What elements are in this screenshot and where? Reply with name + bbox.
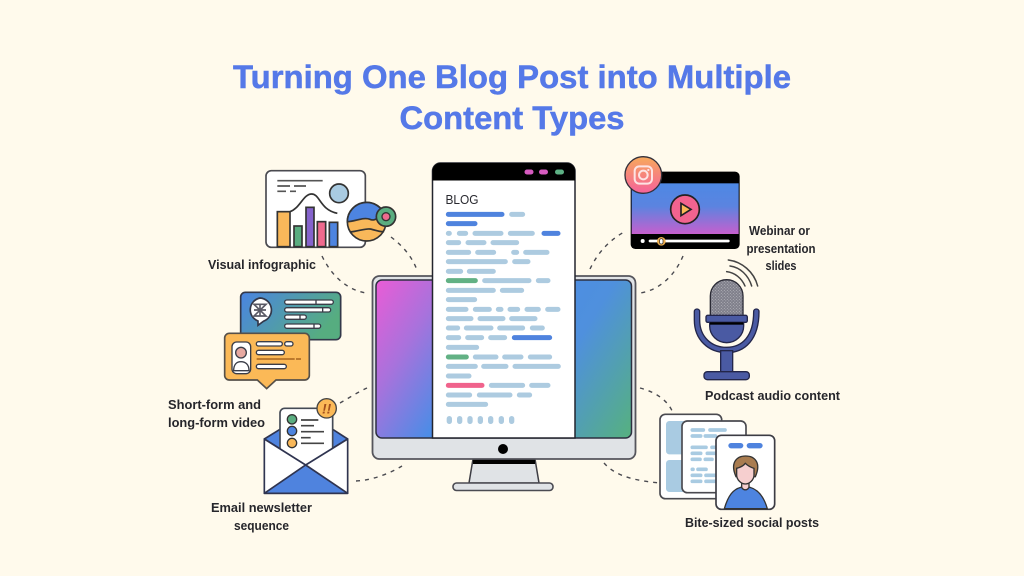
label: short-form and long-form video: long-form video [168, 415, 265, 430]
title: Turning One Blog Post into Multiple [233, 59, 791, 95]
portrait [232, 342, 251, 374]
chart text lines [277, 181, 323, 191]
middle card [682, 421, 746, 493]
back card [660, 414, 722, 499]
envelope back flap [264, 429, 348, 465]
title: Content Types [400, 100, 624, 136]
letter bullets [287, 415, 297, 448]
monitor body [372, 276, 636, 459]
player screen [632, 183, 739, 234]
icon: microphone [697, 260, 758, 380]
small ring [376, 207, 396, 226]
alert badge: !! [322, 400, 332, 416]
label: podcast audio content: Podcast audio content [705, 388, 841, 403]
monitor stand [453, 459, 553, 490]
progress bar [641, 237, 730, 246]
play button [671, 195, 699, 224]
label: webinar or presentation slides: presentation [746, 241, 816, 256]
instagram badge [625, 157, 662, 193]
chart circle [330, 184, 348, 203]
speech avatar [250, 298, 271, 325]
mic lower cup [710, 323, 744, 343]
player frame [631, 172, 740, 249]
bar chart [277, 207, 338, 247]
blog page body [432, 163, 575, 438]
mic band [706, 315, 747, 322]
title [233, 59, 791, 136]
blog page panel [432, 163, 575, 438]
label: webinar or presentation slides: Webinar or [749, 223, 810, 238]
letter [280, 408, 333, 465]
chart curve [290, 194, 337, 213]
mic base [704, 372, 749, 380]
chart card [266, 171, 365, 247]
dashed connectors [322, 232, 683, 483]
mic head mesh [710, 280, 743, 316]
blog text lines [448, 214, 558, 421]
label: visual infographic: Visual infographic [208, 257, 316, 272]
label: short-form and long-form video [168, 397, 265, 430]
monitor camera dot [498, 444, 508, 454]
label: bite-sized social posts: Bite-sized social posts [685, 515, 819, 530]
blue bubble lines [285, 300, 333, 328]
blog header bar [432, 163, 575, 180]
mic holder [697, 312, 756, 350]
blog heading: BLOG [446, 193, 478, 207]
sound waves [727, 260, 758, 286]
front card [716, 435, 775, 509]
monitor screen [376, 280, 632, 438]
label: email newsletter sequence [211, 500, 312, 533]
letter lines [301, 420, 324, 443]
icon: visual infographic [266, 171, 396, 247]
icon: chat bubbles [225, 292, 341, 389]
icon: video player [625, 157, 740, 249]
label: email newsletter sequence: Email newsletter [211, 500, 312, 515]
orange bubble lines [256, 342, 293, 369]
label: email newsletter sequence: sequence [234, 518, 289, 533]
person [724, 456, 767, 509]
orange chat bubble [225, 333, 309, 389]
label: short-form and long-form video: Short-form and [168, 397, 261, 412]
monitor [372, 276, 636, 490]
label: webinar or presentation slides: slides [766, 258, 796, 273]
icon: social post cards [660, 414, 775, 509]
label: webinar or presentation slides [746, 223, 816, 273]
envelope bottom flap [264, 465, 348, 493]
pie globe [347, 202, 386, 241]
envelope front [264, 439, 348, 493]
icon: email envelope [264, 399, 348, 493]
blue chat bubble [241, 292, 341, 340]
mic stem [721, 351, 733, 372]
